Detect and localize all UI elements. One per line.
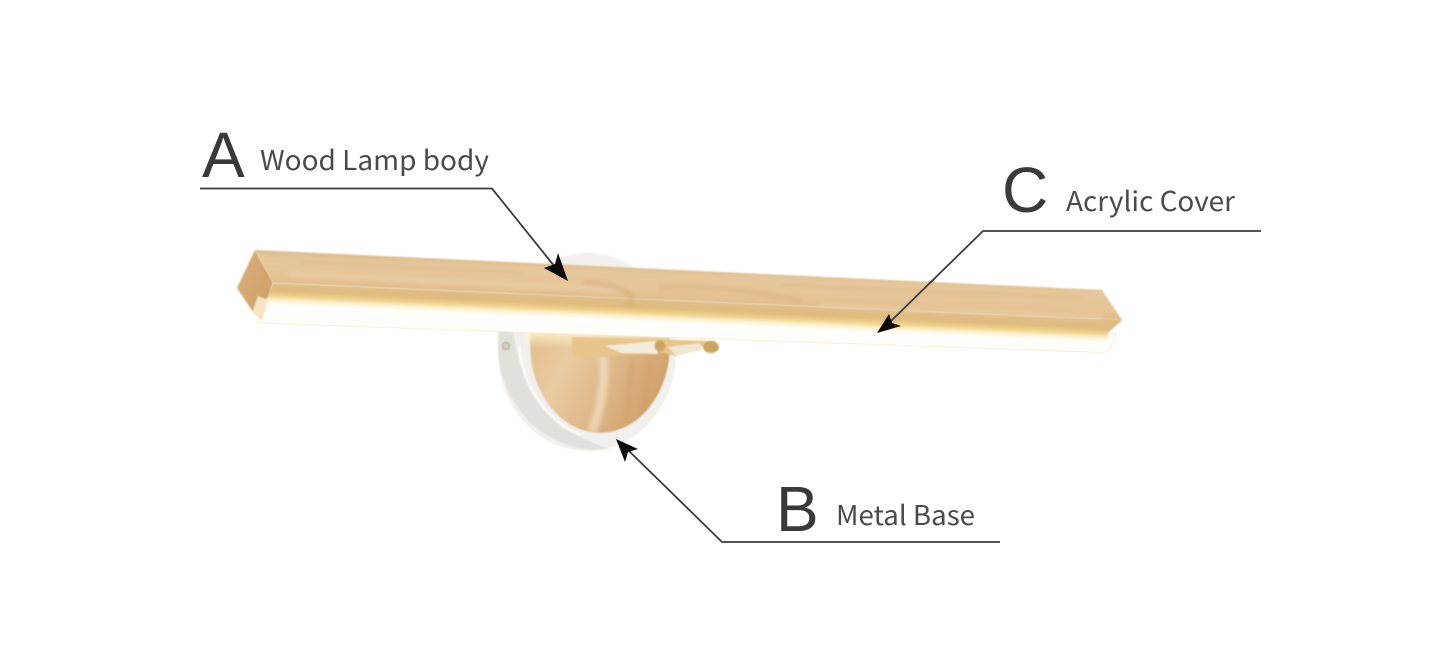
- label: Wood Lamp body: Wood Lamp body: [260, 139, 489, 178]
- letter A: A: [202, 119, 245, 191]
- end cap of cover: [252, 296, 268, 321]
- label: Metal Base: Metal Base: [836, 494, 975, 533]
- lamp bar: [237, 250, 1122, 352]
- acrylic cover: [258, 298, 1116, 352]
- leader arrow C: [877, 231, 1261, 333]
- white metal disc: [498, 253, 676, 451]
- wall base: [498, 253, 719, 451]
- label: Acrylic Cover: Acrylic Cover: [1066, 180, 1236, 219]
- right underside tip: [1096, 319, 1122, 332]
- letter C: C: [1002, 154, 1048, 226]
- wood front face: [255, 250, 1122, 320]
- wood disc: [525, 333, 675, 434]
- callout B: [616, 439, 1000, 545]
- callout C: [877, 154, 1261, 333]
- wood underside and glow: [262, 283, 1122, 342]
- screw: [502, 342, 510, 350]
- wood grain: [290, 262, 1100, 316]
- arm: [572, 337, 719, 359]
- leader arrow A: [200, 188, 568, 281]
- letter B: B: [776, 473, 819, 545]
- wood end cap: [237, 250, 273, 312]
- leader arrow B: [616, 439, 1000, 542]
- callout A: [200, 119, 568, 281]
